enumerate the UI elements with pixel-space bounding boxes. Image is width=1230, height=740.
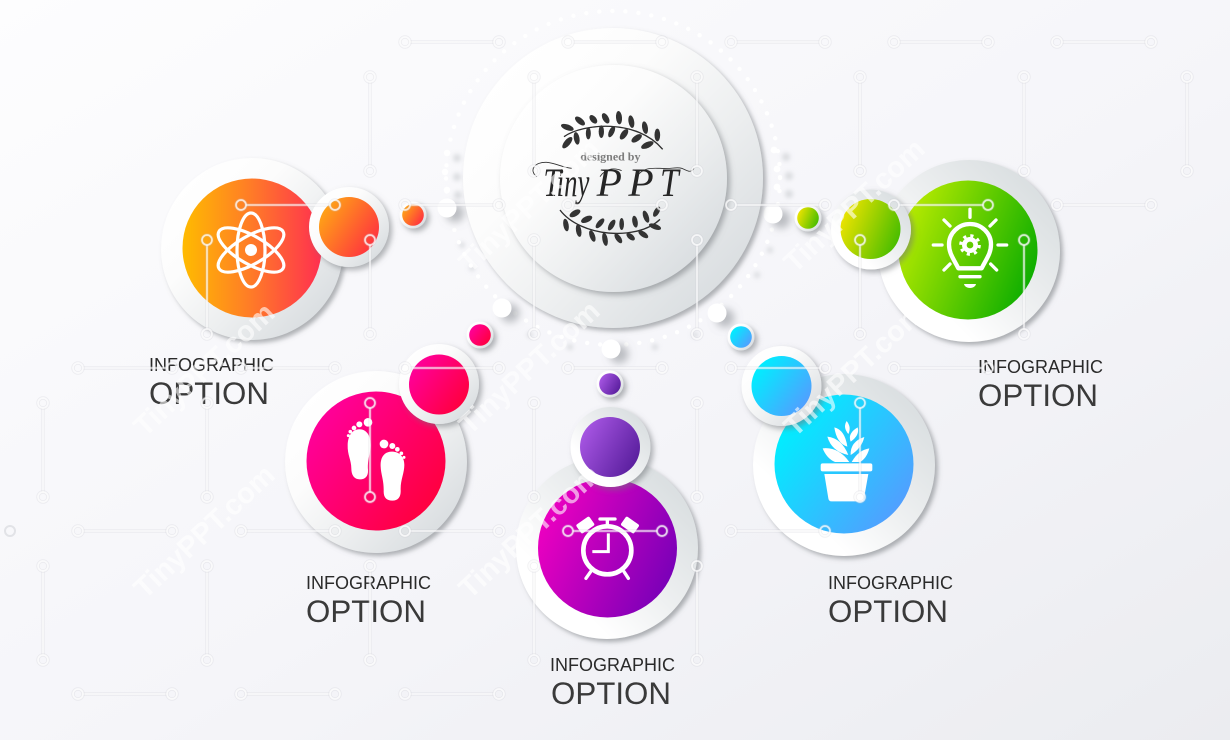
text: option 2: INFOGRAPHIC [306,573,431,593]
purple small dot [596,370,624,398]
script wordmark [543,160,681,205]
watermarks: TinyPPT.com [778,297,931,443]
blue medium disc [742,346,822,426]
purple colour disc [538,478,677,618]
script wordmark: T [543,160,562,205]
text: option 3 [550,655,675,711]
text: option 2: OPTION [306,594,426,629]
orange outer disc [161,158,343,340]
top wreath [560,111,663,151]
watermarks [128,133,931,605]
text: option 5: OPTION [978,378,1098,413]
script wordmark: P [627,160,654,205]
purple medium disc [570,407,650,487]
icon: alarm clock [576,516,640,578]
flourishes [533,162,694,177]
text: option 4 [828,573,953,629]
text: option 1: OPTION [149,376,269,411]
icon: light bulb with gear [933,209,1007,288]
pink small dot [466,322,494,348]
panel: green bulb option [794,160,1060,342]
pink outer disc [285,371,467,553]
watermarks: TinyPPT.com [453,295,606,441]
watermarks: TinyPPT.com [128,459,281,605]
orange medium disc [309,187,389,267]
script wordmark: iny [557,160,589,205]
text: option 3: OPTION [551,676,671,711]
text: option 2 [306,573,431,629]
watermarks: TinyPPT.com [453,459,606,605]
blue small dot [728,324,754,350]
dotted ring around central disc [442,11,793,350]
text: option 4: OPTION [828,594,948,629]
orange small dot [400,202,426,228]
text: option 1: INFOGRAPHIC [149,355,274,375]
green small dot [794,204,822,232]
watermarks: TinyPPT.com [128,297,281,443]
icon: potted plant [821,421,872,501]
pink colour disc [306,392,446,530]
bottom wreath [560,205,662,246]
panel: orange atom option [161,158,426,340]
logo: designed by TinyPPT: designed by [580,150,640,164]
text: option 5: INFOGRAPHIC [978,357,1103,377]
text: option 1 [149,355,274,411]
white connector balls [438,198,782,358]
text: option 4: INFOGRAPHIC [828,573,953,593]
orange colour disc [182,178,322,318]
green medium disc [831,190,911,270]
text: option 3: INFOGRAPHIC [550,655,675,675]
script wordmark: T [660,160,681,205]
watermarks: TinyPPT.com [778,133,931,279]
watermarks: TinyPPT.com [453,133,606,279]
purple outer disc [516,457,698,639]
blue colour disc [774,394,914,534]
panel: blue plant option [728,324,935,556]
central disc [463,28,763,328]
green outer disc [878,160,1060,342]
panel: pink feet option [285,322,494,553]
text: option 5 [978,357,1103,413]
green colour disc [898,180,1038,320]
script wordmark: P [596,160,622,205]
logo: designed by TinyPPT [533,111,694,246]
pink medium disc [399,344,479,424]
icon: feet [347,418,405,501]
panel: purple clock option [516,370,698,639]
blue outer disc [753,374,935,556]
icon: atom [212,213,290,287]
